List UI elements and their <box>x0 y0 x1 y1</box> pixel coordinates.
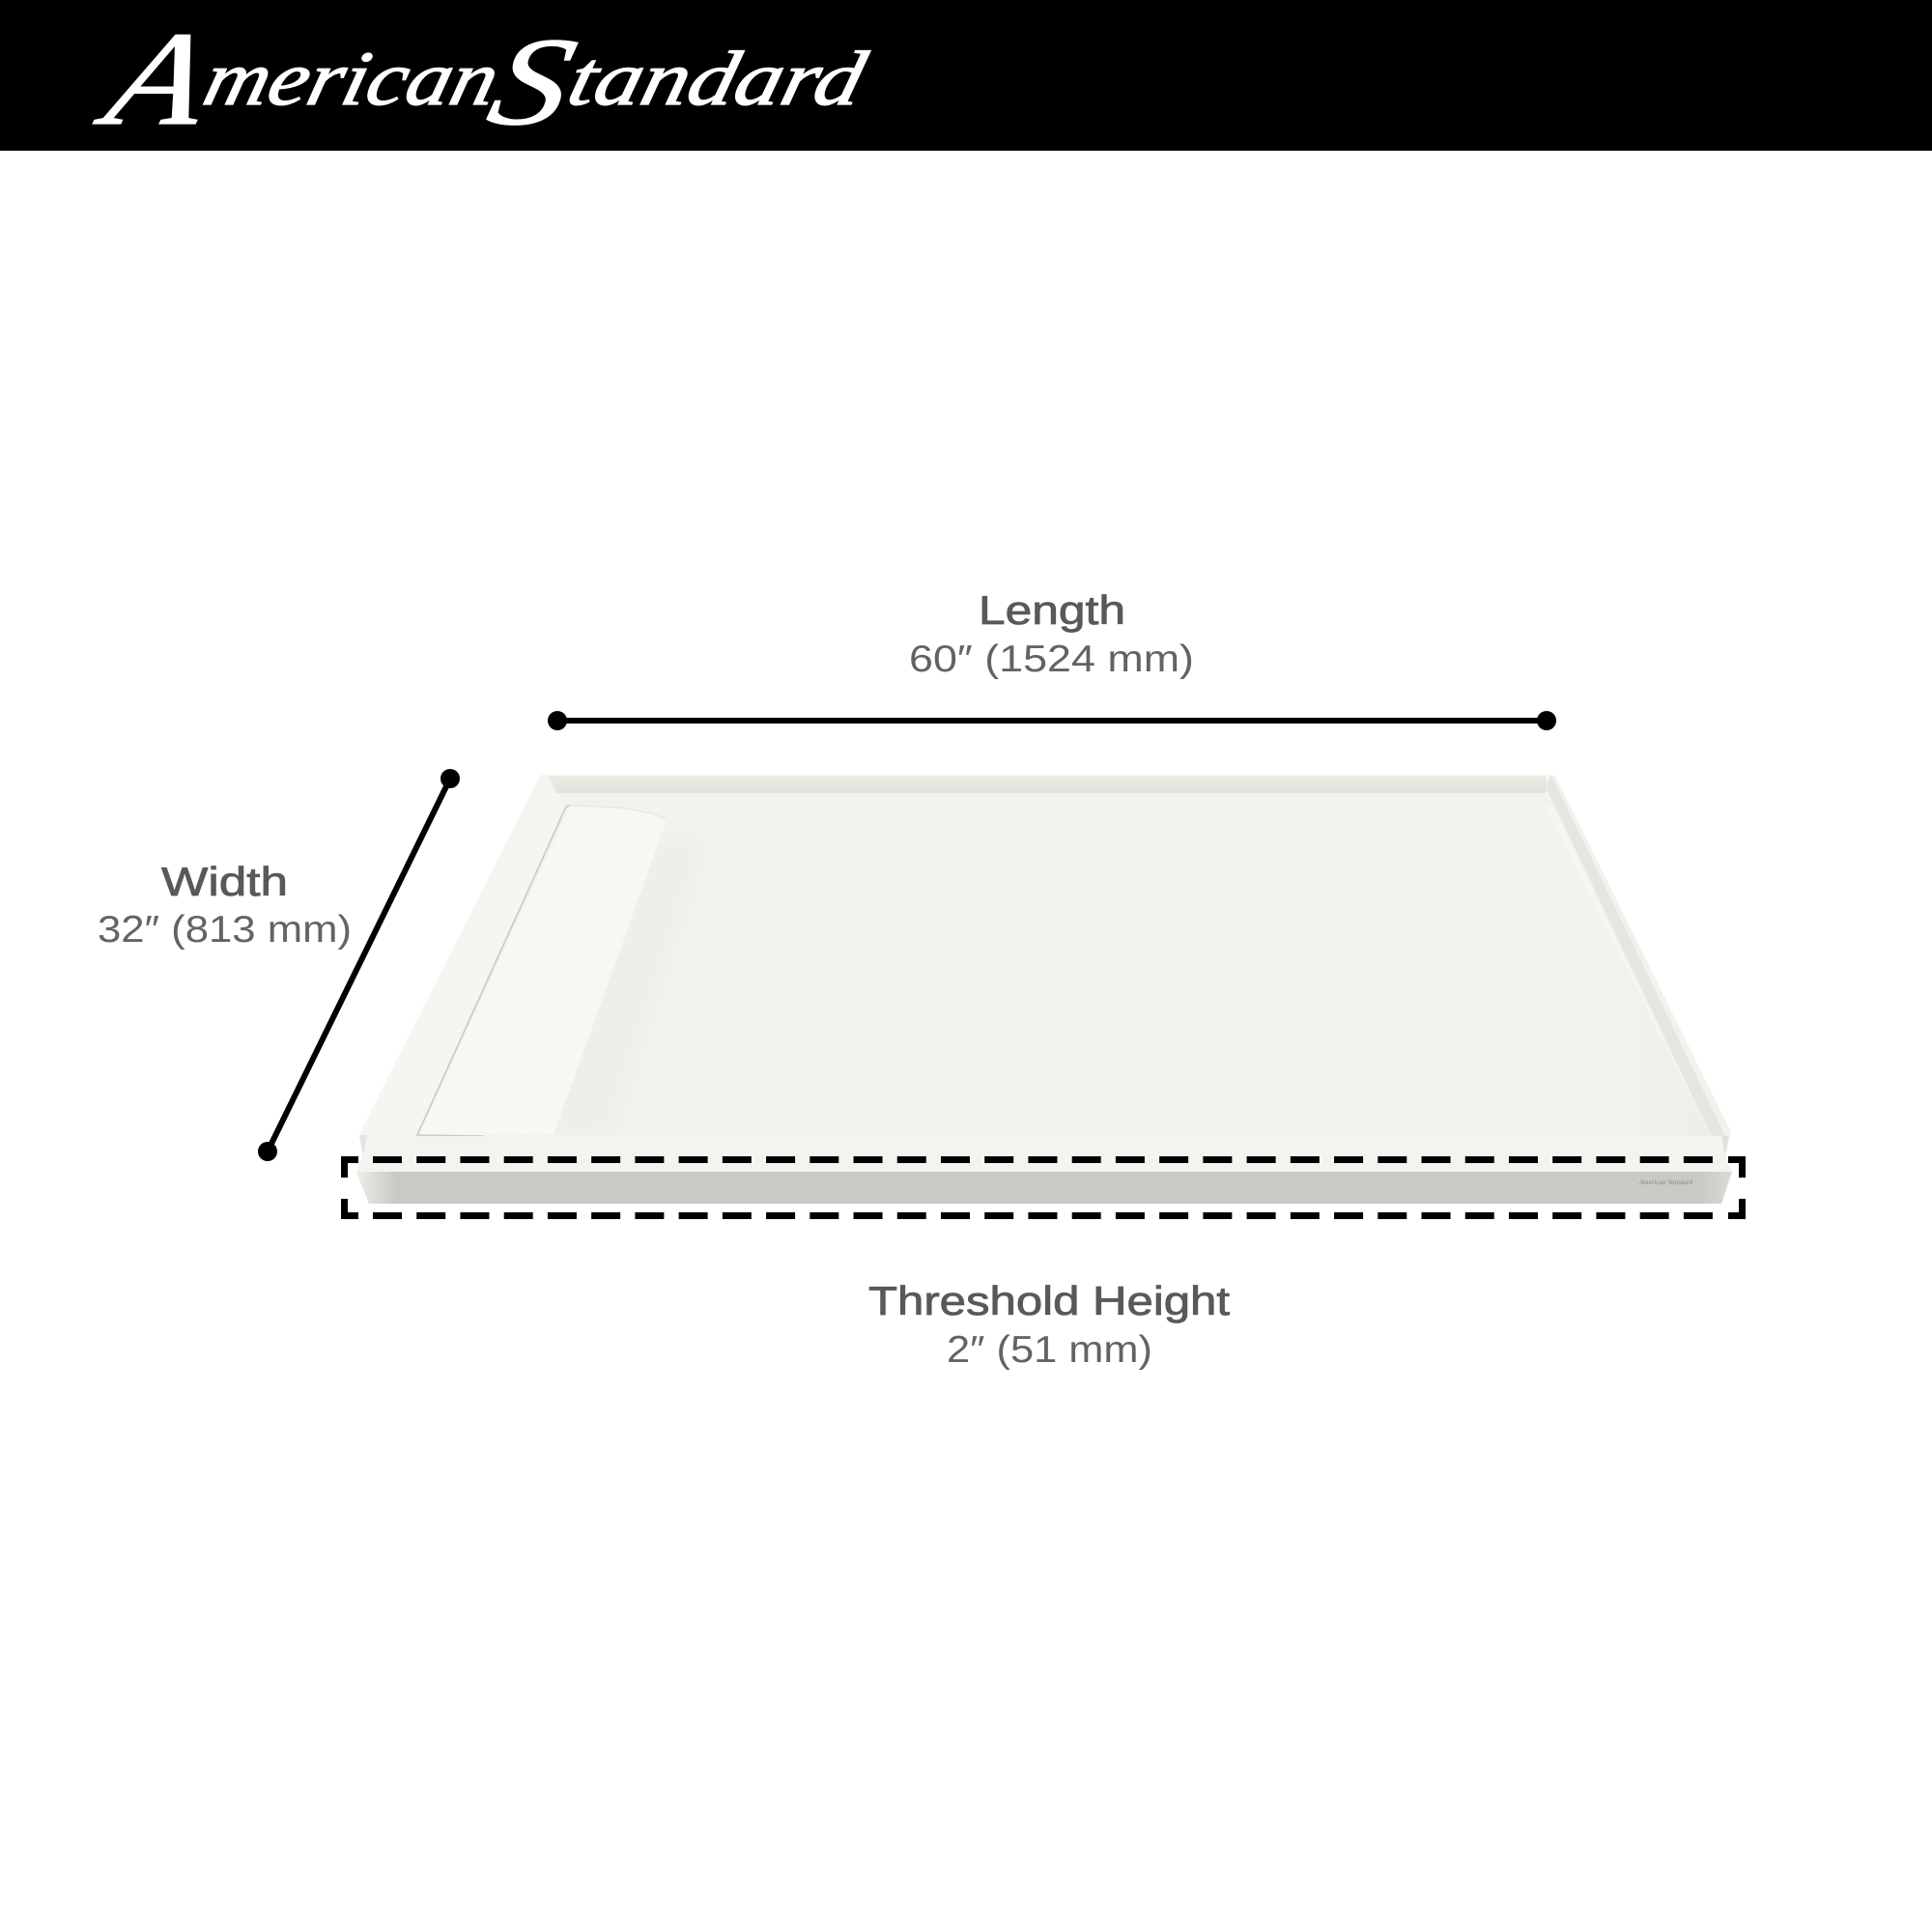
logo: American Standard: S <box>477 12 588 152</box>
front threshold face <box>356 1172 1732 1204</box>
right wall <box>1546 775 1729 1150</box>
length dimension <box>548 587 1556 730</box>
shadow on floor beside drain <box>551 840 705 1132</box>
threshold value: 2″ (51 mm) <box>947 1329 1152 1371</box>
right wall end cap <box>1718 1136 1729 1156</box>
width dimension <box>98 769 460 1161</box>
front threshold lip <box>356 1136 1732 1172</box>
shower floor <box>410 806 1712 1140</box>
threshold height dimension <box>868 1278 1230 1371</box>
back ledge <box>545 793 1551 805</box>
threshold dashed callout box <box>344 1159 1743 1215</box>
width value: 32″ (813 mm) <box>98 909 352 951</box>
threshold heading: Threshold Height <box>868 1278 1230 1323</box>
linear drain cover <box>418 807 667 1135</box>
logo: American Standard: tandard <box>560 36 874 122</box>
width heading: Width <box>161 859 288 904</box>
right bevel of front face <box>1700 1172 1732 1204</box>
logo: American Standard <box>85 4 880 154</box>
left wall end cap <box>359 1135 372 1156</box>
tray outer body <box>356 775 1732 1172</box>
width measure line <box>258 769 460 1161</box>
drain top shadow curve <box>570 806 668 820</box>
length value: 60″ (1524 mm) <box>909 639 1194 680</box>
logo: American Standard: merican <box>196 36 508 122</box>
back wall <box>549 776 1547 793</box>
left bevel of front face <box>356 1172 396 1204</box>
left rim <box>359 775 567 1136</box>
right outer rim highlight <box>1551 775 1731 1136</box>
length heading: Length <box>979 587 1125 633</box>
small brand mark on threshold: American Standard <box>1638 1179 1693 1186</box>
header bar <box>0 0 1932 154</box>
shower base tray <box>356 775 1732 1204</box>
logo: American Standard: A <box>85 4 226 154</box>
drain channel line <box>417 806 570 1136</box>
length measure line <box>548 711 1556 730</box>
